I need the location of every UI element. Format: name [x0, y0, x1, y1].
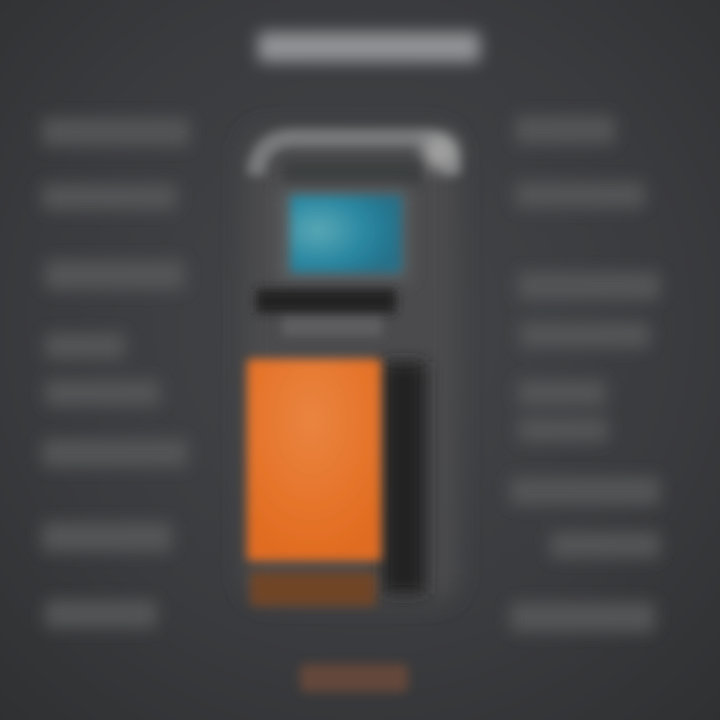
device top band [256, 138, 452, 175]
grey strip [282, 318, 382, 336]
device top inner [283, 160, 421, 186]
screen surround [278, 188, 410, 282]
device body [244, 128, 458, 602]
orange button [300, 664, 408, 692]
lower orange band [250, 572, 376, 606]
device corner highlight [422, 134, 458, 170]
left text column [42, 118, 190, 628]
blue screen [290, 195, 402, 273]
orange panel [247, 359, 381, 561]
device [244, 128, 458, 606]
dark side shadow [382, 362, 426, 594]
right text column [510, 116, 660, 632]
title [258, 32, 480, 62]
black bar [256, 289, 396, 313]
